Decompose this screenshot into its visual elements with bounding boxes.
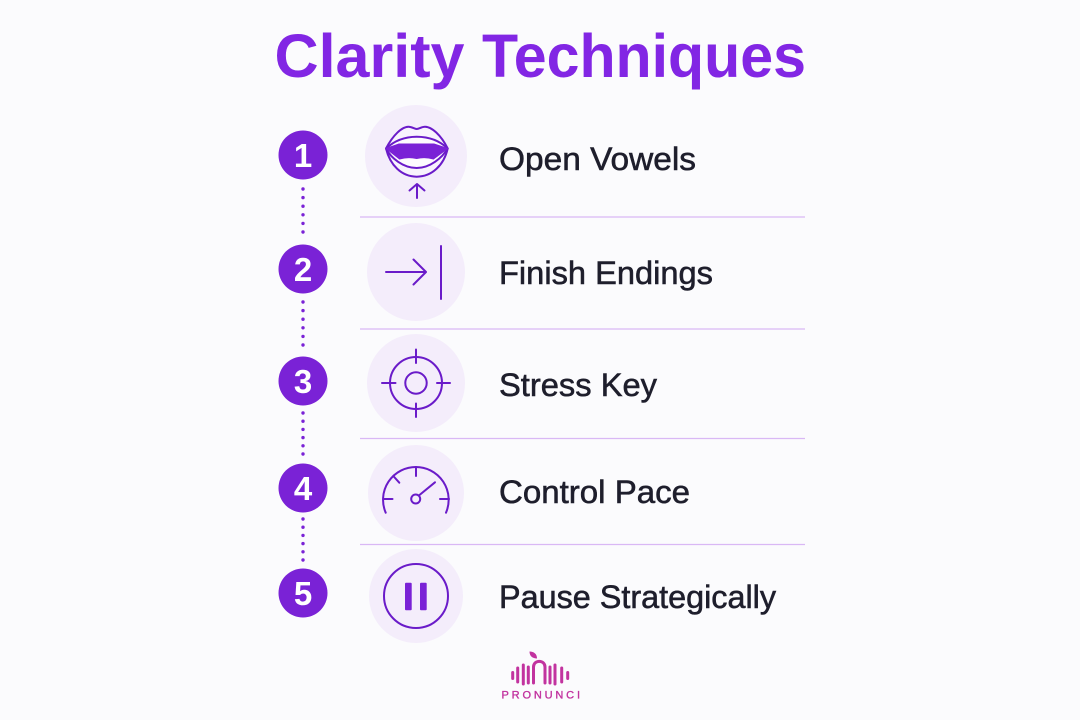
number badge 3: 3 — [294, 363, 312, 400]
number badge 5 — [278, 568, 328, 618]
icon: target — [367, 334, 465, 432]
row 5: pause strategically — [278, 549, 776, 643]
number badge 3 — [278, 356, 328, 406]
label: Stress Key — [499, 367, 657, 403]
number badge 2 — [278, 244, 328, 294]
icon: speedometer — [368, 445, 464, 541]
number badge 4 — [278, 464, 328, 512]
logo: Pronunci — [502, 652, 580, 702]
title — [274, 22, 806, 90]
row 2: finish endings — [278, 223, 713, 321]
label: Open Vowels — [499, 141, 696, 177]
number badge 1: 1 — [294, 137, 312, 174]
label: Finish Endings — [499, 255, 713, 291]
icon: open mouth with up arrow — [365, 105, 467, 207]
label: Pause Strategically — [499, 579, 776, 615]
number badge 2: 2 — [294, 251, 312, 288]
logo mark — [513, 652, 568, 684]
row 1: open vowels — [278, 105, 696, 207]
icon: arrow to bar — [367, 223, 465, 321]
wordmark: PRONUNCI — [502, 690, 580, 702]
number badge 5: 5 — [294, 575, 312, 612]
row 4: control pace — [278, 445, 690, 541]
number badge 1 — [278, 130, 328, 180]
row 3: stress key — [278, 334, 657, 432]
title: Clarity — [274, 22, 465, 90]
label: Control Pace — [499, 474, 690, 510]
icon: pause — [369, 549, 463, 643]
number badge 4: 4 — [294, 470, 313, 507]
title: Techniques — [482, 22, 806, 90]
